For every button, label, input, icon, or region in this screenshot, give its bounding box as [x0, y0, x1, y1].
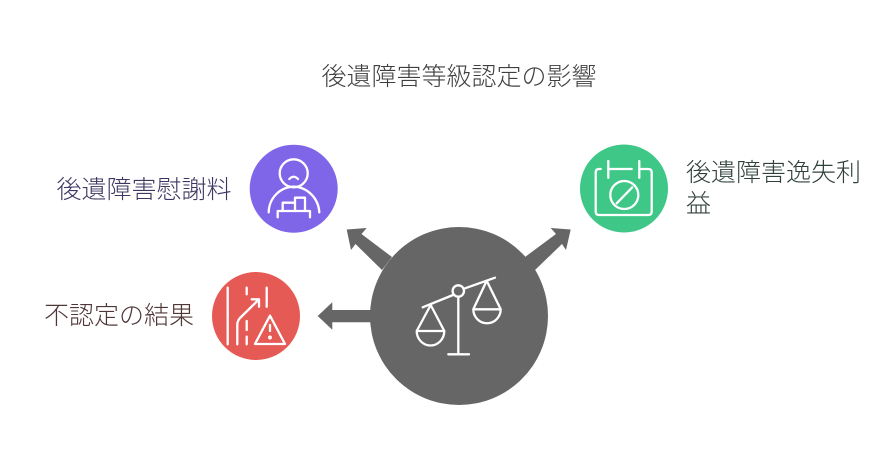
central circle with scales — [370, 227, 548, 405]
label: 後遺障害慰謝料: 後遺障害慰謝料 — [56, 176, 232, 204]
label: 後遺障害逸失利益: 益 — [686, 190, 711, 218]
label: 不認定の結果: 不認定の結果 — [44, 302, 194, 330]
red circle — [212, 272, 300, 360]
panel: 不認定の結果 — [44, 272, 300, 360]
icon: balance scales — [417, 278, 501, 354]
arrow: to left — [318, 302, 375, 330]
panel: 後遺障害逸失利益 — [580, 144, 861, 232]
panel: 後遺障害慰謝料 — [56, 145, 338, 233]
arrow: to upper right — [525, 228, 571, 270]
purple circle — [250, 145, 338, 233]
icon: calendar with prohibition sign — [596, 161, 652, 215]
label: 後遺障害逸失利益: 後遺障害逸失利 — [686, 159, 861, 187]
icon: road with warning — [228, 288, 285, 344]
arrow: to upper left — [347, 228, 392, 270]
green circle — [580, 144, 668, 232]
icon: person with podium — [269, 159, 319, 217]
title: 後遺障害等級認定の影響 — [322, 63, 597, 91]
